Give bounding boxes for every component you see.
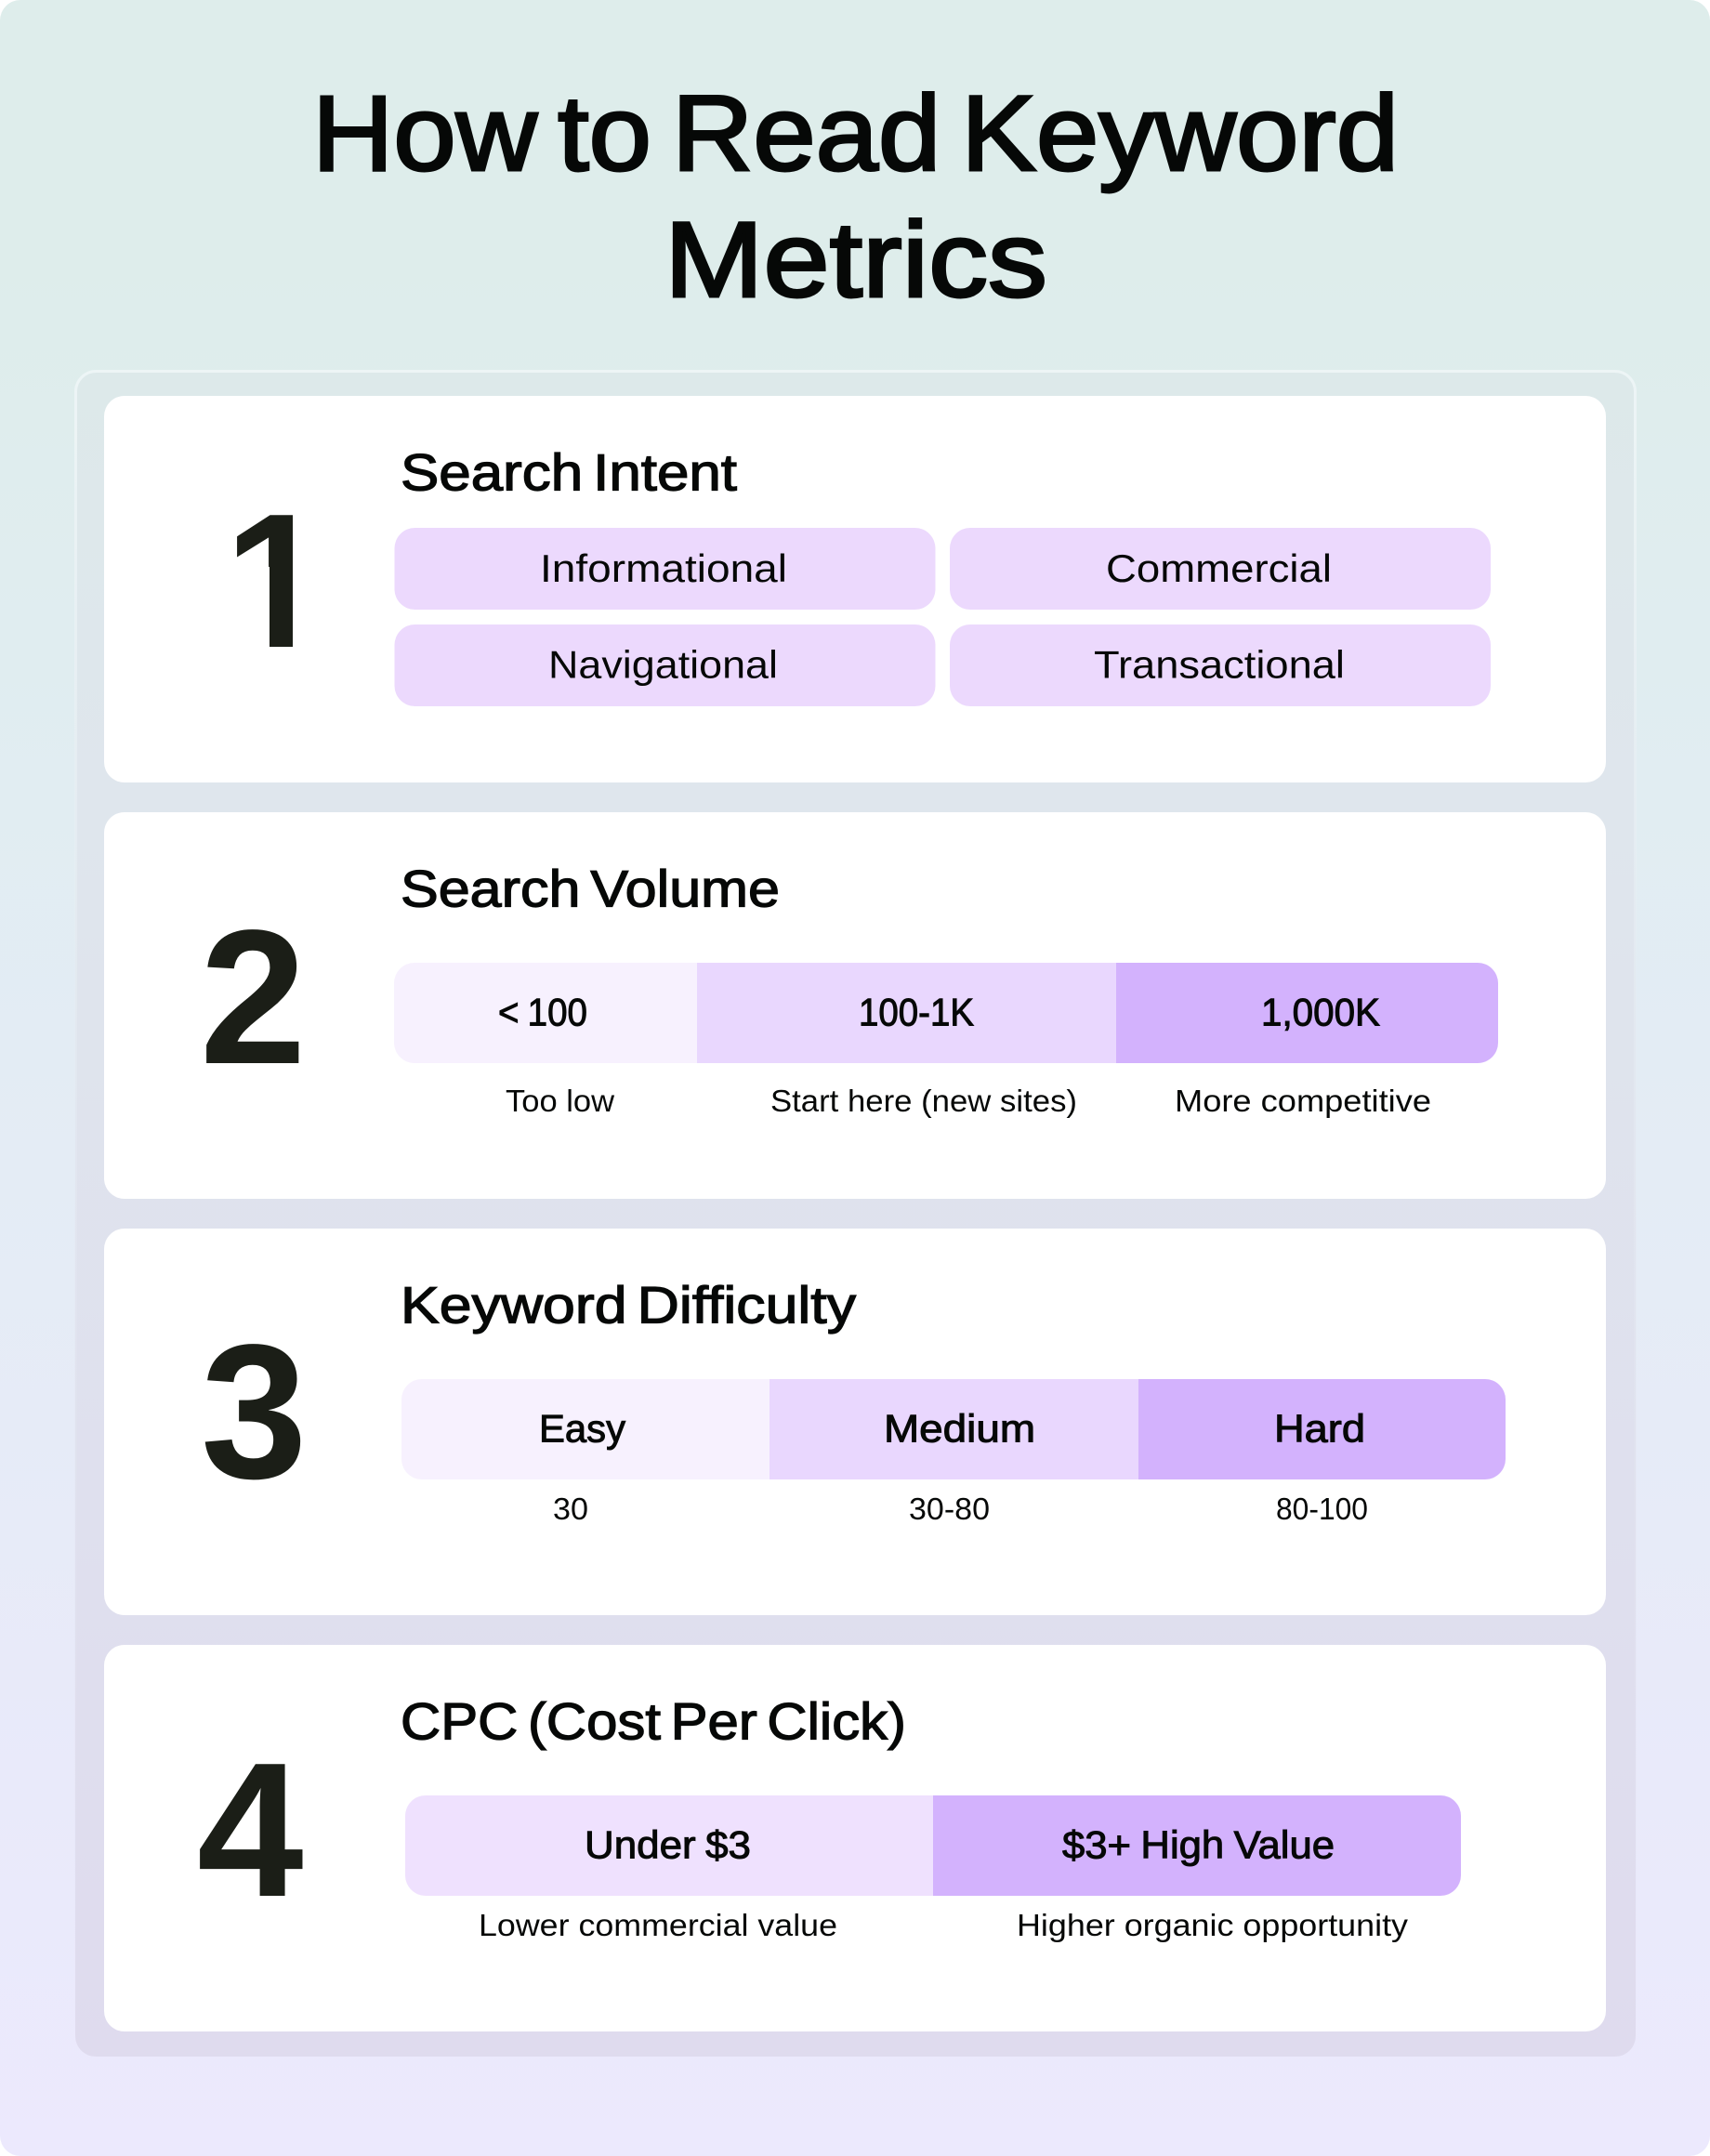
- captions: volume: Start here (new sites): [770, 1084, 1077, 1118]
- pill: transactional: Transactional: [1094, 643, 1345, 686]
- captions: cpc: Higher organic opportunity: [1017, 1908, 1409, 1942]
- panel: cpc: [104, 1645, 1606, 2031]
- captions: volume: More competitive: [1175, 1084, 1431, 1118]
- heading: cpc: CPC (Cost Per Click): [401, 1691, 906, 1751]
- pill: navigational: Navigational: [548, 643, 778, 686]
- pill: transactional: [950, 624, 1491, 706]
- bar: volume ranges: 1,000K: [1261, 991, 1380, 1033]
- bar: cpc ranges: Under $3: [585, 1823, 751, 1866]
- captions: cpc: [479, 1908, 1409, 1942]
- captions: cpc: Lower commercial value: [479, 1908, 837, 1942]
- title: [312, 74, 1399, 320]
- heading: search intent: Search Intent: [401, 442, 737, 502]
- captions: difficulty: 30-80: [909, 1492, 990, 1526]
- bar: cpc ranges: [405, 1795, 1461, 1896]
- panel: metrics container: [75, 371, 1636, 2057]
- title: Metrics: [664, 201, 1047, 320]
- number 4: 4: [197, 1723, 304, 1937]
- bar: difficulty ranges: [401, 1379, 1506, 1479]
- captions: difficulty: 80-100: [1276, 1492, 1368, 1526]
- bar: cpc ranges: $3+ High Value: [1062, 1823, 1335, 1866]
- bar: volume ranges: 100-1K: [859, 991, 974, 1033]
- number 2: 2: [200, 890, 307, 1104]
- title: How to Read Keyword: [312, 74, 1399, 193]
- captions: difficulty: [553, 1492, 1368, 1526]
- heading: keyword difficulty: Keyword Difficulty: [401, 1275, 856, 1334]
- panel: keyword difficulty: [104, 1229, 1606, 1615]
- captions: volume: Too low: [506, 1084, 614, 1118]
- captions: volume: [506, 1084, 1431, 1118]
- captions: difficulty: 30: [553, 1492, 588, 1526]
- heading: search volume: Search Volume: [401, 859, 780, 918]
- number 1: 1: [224, 474, 331, 688]
- panel: search intent: [104, 396, 1606, 782]
- bar: volume ranges: < 100: [498, 991, 587, 1033]
- pill: informational: [394, 528, 935, 610]
- pill: navigational: [394, 624, 935, 706]
- bar: volume ranges: [394, 963, 1498, 1063]
- number 3: 3: [201, 1305, 308, 1518]
- pill: commercial: Commercial: [1106, 546, 1332, 590]
- bar: difficulty ranges: Easy: [539, 1407, 625, 1450]
- bar: difficulty ranges: Medium: [884, 1407, 1035, 1450]
- bar: difficulty ranges: Hard: [1274, 1407, 1365, 1450]
- panel: search volume: [104, 812, 1606, 1199]
- pill: commercial: [950, 528, 1491, 610]
- pill: informational: Informational: [540, 546, 787, 590]
